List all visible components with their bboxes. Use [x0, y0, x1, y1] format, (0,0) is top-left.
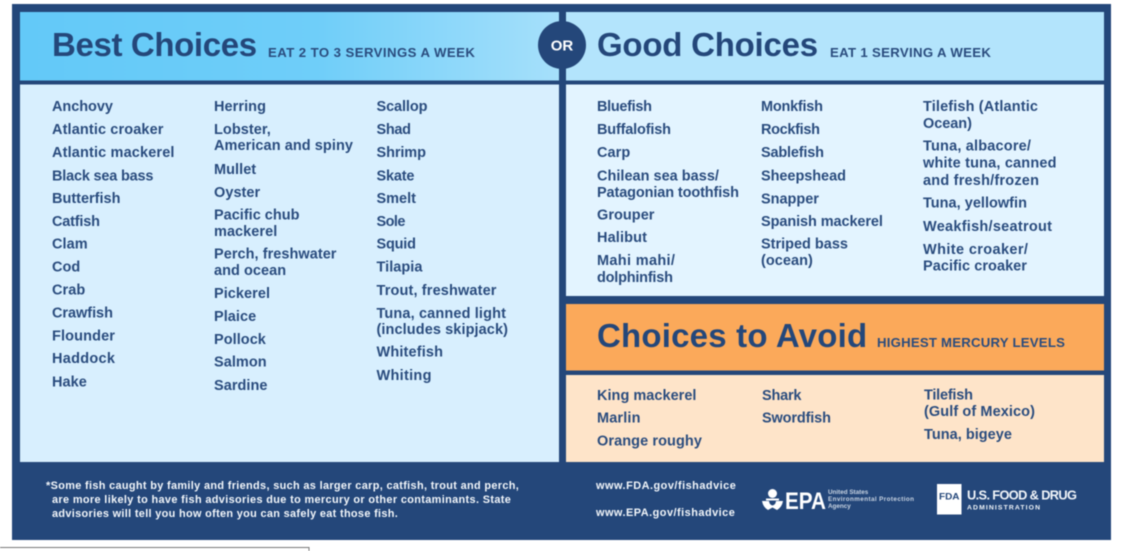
list column 2: Sardine	[214, 378, 268, 394]
list column 3: Whitefish	[376, 344, 443, 360]
list column 1: Catfish	[52, 214, 100, 230]
list column 3	[376, 99, 508, 384]
icon: EPA flower	[762, 489, 783, 510]
good list column 3: Tuna, yellowfin	[923, 196, 1027, 212]
list column 3: (includes skipjack)	[376, 322, 508, 338]
good list column 3: white tuna, canned	[922, 156, 1056, 172]
list column 2: Herring	[214, 99, 266, 115]
good list column 2: Monkfish	[761, 99, 823, 115]
list column 2: and ocean	[214, 263, 286, 279]
OR badge	[538, 21, 586, 69]
good list column 3: Pacific croaker	[923, 258, 1027, 274]
panel: choices to avoid list	[566, 375, 1104, 462]
list column 2: mackerel	[214, 224, 277, 240]
list column 2: Plaice	[214, 309, 256, 325]
list column 2: Pollock	[214, 332, 267, 348]
list column 1: Hake	[52, 374, 87, 390]
cropped box at bottom edge	[0, 548, 309, 551]
list column 3: Scallop	[376, 99, 428, 115]
avoid list column 3: Tilefish	[924, 388, 973, 404]
list column 3: Shrimp	[376, 145, 426, 161]
list column 3: Shad	[376, 122, 411, 138]
footnote: advisories will tell you how often you can safely eat those fish.	[52, 508, 398, 520]
list column 3: Smelt	[376, 191, 416, 207]
avoid list column 2	[762, 388, 831, 426]
list column 2: Perch, freshwater	[214, 246, 337, 262]
good list column 1: Mahi mahi/	[597, 253, 675, 269]
list column 2: Oyster	[214, 185, 261, 201]
good list column 1: Chilean sea bass/	[597, 168, 719, 184]
good list column 2: (ocean)	[761, 253, 813, 269]
EPA logo: United States	[828, 489, 869, 496]
panel: best choices list	[20, 84, 559, 462]
good list column 2: Spanish mackerel	[761, 214, 883, 230]
list column 1: Crawfish	[52, 306, 113, 322]
EPA logo	[762, 488, 914, 515]
list column 2: Pacific chub	[214, 208, 300, 224]
list column 3: Skate	[376, 168, 414, 184]
heading: good choices: Good Choices	[597, 26, 819, 63]
avoid list column 1: Orange roughy	[597, 434, 702, 450]
heading: choices to avoid: Choices to Avoid	[597, 317, 868, 354]
list column 1: Haddock	[52, 351, 116, 367]
good list column 3	[922, 99, 1056, 274]
FDA logo: FDA	[939, 492, 960, 502]
good list column 2: Striped bass	[761, 236, 848, 252]
avoid list column 1: King mackerel	[597, 388, 696, 404]
avoid list column 1: Marlin	[597, 410, 640, 426]
good list column 1: Buffalofish	[597, 122, 671, 138]
list column 1	[52, 99, 174, 390]
list column 2: Pickerel	[214, 286, 270, 302]
list column 1: Atlantic croaker	[52, 122, 164, 138]
FDA logo: U.S. FOOD & DRUG	[967, 488, 1077, 502]
website links: www.EPA.gov/fishadvice	[595, 507, 735, 519]
list column 1: Butterfish	[52, 191, 120, 207]
panel: good choices list	[566, 84, 1104, 296]
OR badge: OR	[551, 38, 573, 54]
subheading: mercury: HIGHEST MERCURY LEVELS	[877, 335, 1065, 350]
good list column 1: Patagonian toothfish	[597, 185, 739, 201]
good list column 3: Weakfish/seatrout	[923, 219, 1052, 235]
EPA logo: Agency	[828, 503, 851, 510]
list column 3: Sole	[376, 214, 406, 230]
good list column 3: Tilefish (Atlantic	[923, 99, 1038, 115]
list column 3: Squid	[376, 236, 416, 252]
good list column 1: Grouper	[597, 208, 655, 224]
good list column 1: Bluefish	[597, 99, 652, 115]
avoid list column 1	[597, 388, 702, 450]
panel: good choices header	[566, 12, 1104, 80]
avoid list column 3: Tuna, bigeye	[924, 427, 1012, 443]
list column 1: Clam	[52, 236, 88, 252]
list column 2: Salmon	[214, 354, 267, 370]
list column 2: Mullet	[214, 162, 256, 178]
list column 3: Trout, freshwater	[376, 283, 497, 299]
good list column 2: Sablefish	[761, 145, 824, 161]
list column 1: Anchovy	[52, 99, 113, 115]
footnote: are more likely to have fish advisories due to mercury or other contaminants. State	[52, 494, 511, 506]
heading: best choices: Best Choices	[52, 26, 258, 63]
list column 1: Crab	[52, 282, 85, 298]
list column 2: American and spiny	[214, 138, 353, 154]
avoid list column 2: Swordfish	[762, 410, 831, 426]
good list column 3: and fresh/frozen	[923, 173, 1039, 189]
subheading: serving: EAT 1 SERVING A WEEK	[830, 45, 991, 60]
list column 2: Lobster,	[214, 122, 271, 138]
list column 1: Black sea bass	[52, 168, 154, 184]
list column 3: Whiting	[376, 368, 432, 384]
good list column 3: Ocean)	[923, 116, 972, 132]
list column 2	[214, 99, 353, 394]
good list column 2: Rockfish	[761, 122, 820, 138]
EPA logo: EPA	[785, 488, 826, 515]
good list column 1	[597, 99, 739, 286]
good list column 2: Snapper	[761, 192, 819, 208]
good list column 2	[761, 99, 883, 269]
avoid list column 3	[924, 388, 1035, 443]
list column 3: Tilapia	[376, 260, 423, 276]
website links: www.FDA.gov/fishadvice	[595, 480, 736, 492]
list column 1: Cod	[52, 260, 80, 276]
footnote: *Some fish caught by family and friends, such as larger carp, catfish, trout and perch,	[46, 480, 519, 492]
good list column 3: Tuna, albacore/	[923, 138, 1031, 154]
website links	[595, 480, 736, 519]
avoid list column 2: Shark	[762, 388, 802, 404]
panel: best choices header	[20, 12, 559, 80]
good list column 1: Carp	[597, 145, 630, 161]
EPA logo: Environmental Protection	[828, 496, 914, 503]
avoid list column 3: (Gulf of Mexico)	[924, 404, 1035, 420]
footnote	[46, 480, 519, 520]
good list column 3: White croaker/	[923, 242, 1028, 258]
subheading: servings: EAT 2 TO 3 SERVINGS A WEEK	[268, 45, 475, 60]
list column 1: Atlantic mackerel	[52, 145, 174, 161]
good list column 1: dolphinfish	[597, 270, 673, 286]
list column 3: Tuna, canned light	[376, 306, 506, 322]
FDA logo	[937, 484, 1077, 514]
panel: choices to avoid header	[566, 304, 1104, 370]
FDA logo: ADMINISTRATION	[967, 504, 1040, 512]
good list column 1: Halibut	[597, 230, 647, 246]
good list column 2: Sheepshead	[761, 168, 846, 184]
list column 1: Flounder	[52, 328, 115, 344]
